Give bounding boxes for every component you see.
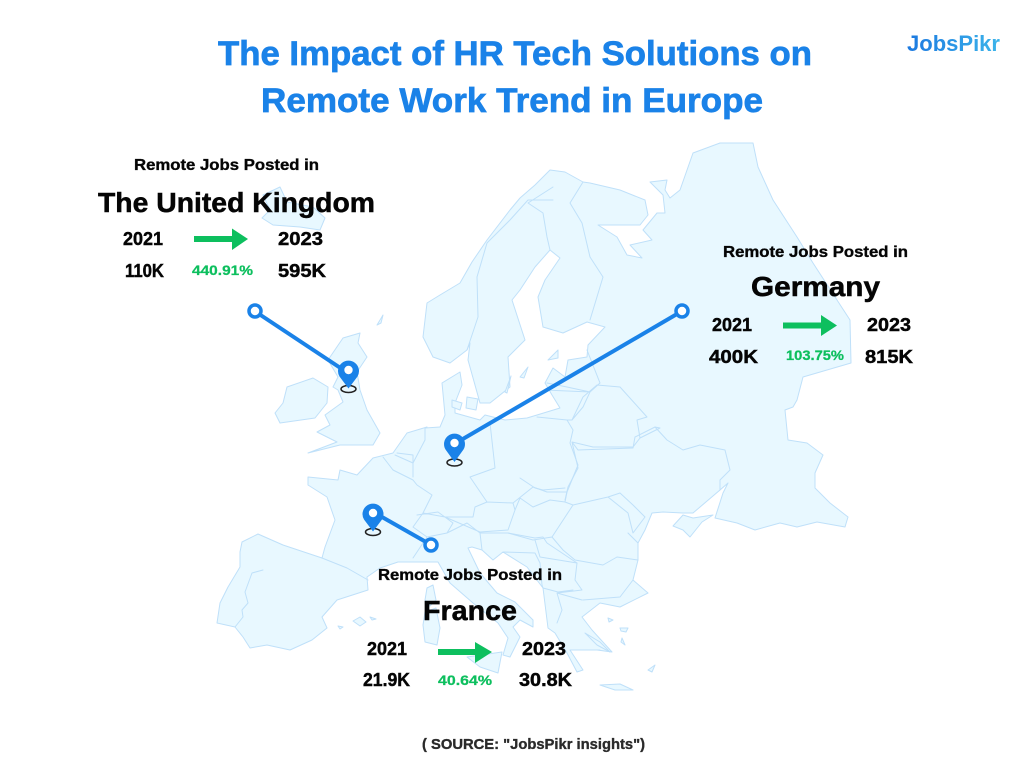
title — [218, 35, 812, 120]
panel: Germany: Germany — [751, 271, 880, 302]
icon: pin United Kingdom — [338, 361, 359, 392]
panel: United Kingdom: 2021 — [123, 228, 163, 249]
panel: Germany: 815K — [865, 346, 914, 367]
panel: France: 30.8K — [519, 669, 573, 690]
panel: France: 21.9K — [363, 669, 411, 690]
title: Remote Work Trend in Europe — [261, 82, 763, 120]
panel: France: 40.64% — [438, 673, 492, 688]
borders — [235, 182, 730, 627]
map of Europe — [217, 143, 851, 690]
panel: United Kingdom: 595K — [278, 260, 327, 281]
Great Britain — [308, 333, 380, 453]
arrow: France growth — [438, 642, 492, 663]
Ireland — [275, 378, 328, 423]
title: The Impact of HR Tech Solutions on — [218, 35, 812, 73]
icon: pin France — [363, 504, 384, 536]
source note: ( SOURCE: "JobsPikr insights") — [422, 736, 645, 753]
panel: United Kingdom: The United Kingdom — [98, 187, 375, 218]
arrow: Germany growth — [783, 315, 837, 336]
panel: Germany: 2023 — [867, 314, 911, 335]
panel: France — [363, 567, 573, 690]
panel: Germany: 400K — [709, 346, 759, 367]
mainland — [217, 143, 851, 672]
panel: United Kingdom: Remote Jobs Posted in — [134, 157, 319, 174]
panel: United Kingdom — [98, 157, 375, 281]
panel: United Kingdom: 2023 — [278, 228, 323, 249]
panel: France: 2021 — [367, 638, 407, 659]
panel: United Kingdom: 440.91% — [192, 263, 253, 278]
panel: Germany — [709, 244, 914, 367]
icon: pin Germany — [444, 434, 465, 466]
panel: Germany: Remote Jobs Posted in — [723, 244, 908, 261]
small islands — [338, 315, 713, 690]
logo: JobsPikr: JobsPikr — [907, 31, 1000, 56]
panel: France: Remote Jobs Posted in — [378, 567, 562, 584]
panel: Germany: 2021 — [712, 314, 752, 335]
arrow: UK growth — [194, 228, 248, 250]
panel: Germany: 103.75% — [786, 348, 844, 363]
panel: France: 2023 — [522, 638, 566, 659]
connector: Germany — [456, 305, 688, 443]
panel: France: France — [423, 595, 517, 626]
Iceland — [262, 187, 325, 230]
connector: United Kingdom — [249, 305, 348, 373]
panel: United Kingdom: 110K — [125, 260, 165, 281]
connector: France — [375, 513, 437, 551]
